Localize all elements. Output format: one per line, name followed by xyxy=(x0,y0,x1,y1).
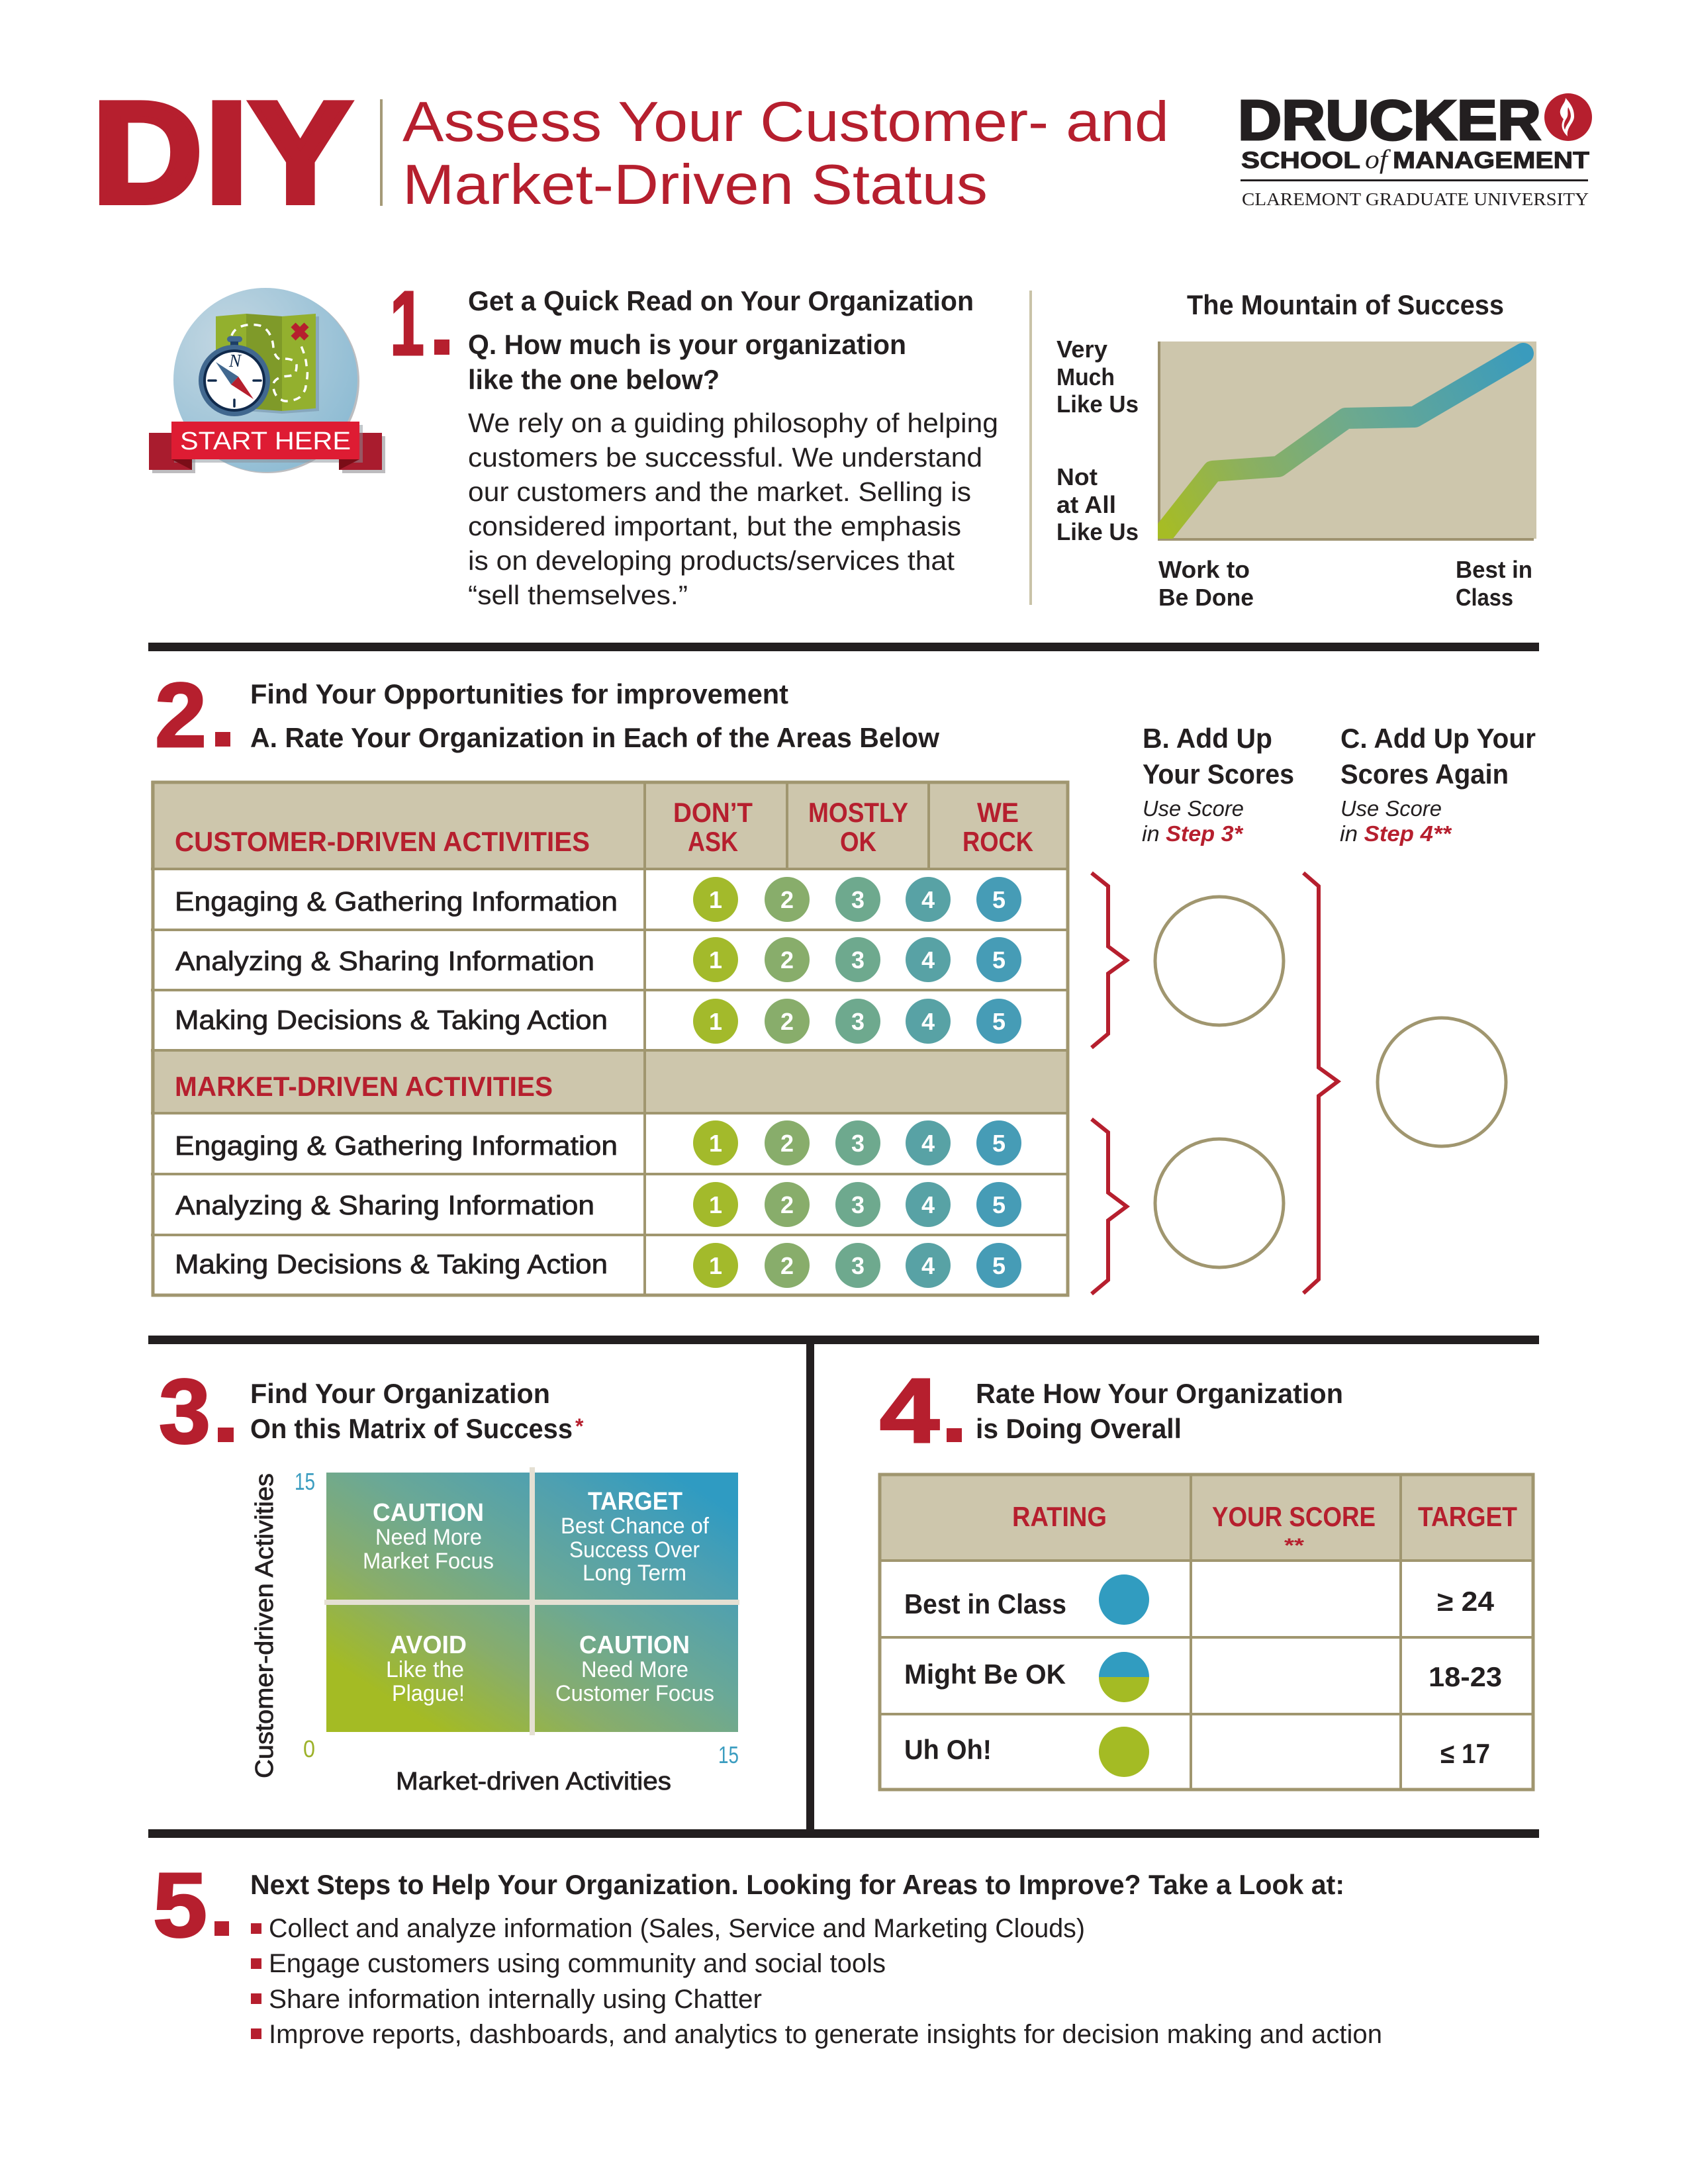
score circles row 4: 5 xyxy=(992,1130,1006,1157)
header: divider xyxy=(380,99,383,206)
rating table xyxy=(151,781,1069,1297)
step 3 heading: * xyxy=(575,1414,584,1438)
chart y axis labels: Not xyxy=(1056,463,1098,490)
row: uh oh xyxy=(904,1727,1490,1777)
score circles row 2 xyxy=(693,937,1021,982)
quadrant: caution, market focus: CAUTION xyxy=(373,1499,484,1527)
column headers: ** xyxy=(1284,1535,1304,1557)
quadrant: caution, customer focus: Need More xyxy=(581,1657,688,1682)
Drucker School of Management logo: SCHOOL xyxy=(1241,148,1360,173)
step 1 heading xyxy=(468,285,974,395)
quadrant: caution, market focus: Need More xyxy=(375,1525,482,1550)
step 1 heading: Q. How much is your organization xyxy=(468,329,906,360)
quadrant: avoid: Like the xyxy=(386,1657,464,1682)
score circles row 2: 1 xyxy=(709,946,722,974)
column B heading: Use Score xyxy=(1143,796,1244,821)
step 1 body text: our customers and the market. Selling is xyxy=(468,477,971,507)
score circles row 5: 4 xyxy=(921,1191,935,1218)
next steps list: Collect and analyze information (Sales, Service and Marketing Clouds) xyxy=(269,1914,1085,1943)
quadrant: target: Long Term xyxy=(583,1561,686,1586)
score circles row 6: 4 xyxy=(921,1252,935,1279)
quadrant: caution, customer focus: Customer Focus xyxy=(555,1681,714,1706)
score circles row 5: 3 xyxy=(851,1191,865,1218)
score circles row 6: 1 xyxy=(709,1252,722,1279)
step 2 heading: Find Your Opportunities for improvement xyxy=(250,678,788,709)
icon: start here badge with map and compass: N xyxy=(228,351,242,371)
row: best in class: Best in Class xyxy=(904,1588,1066,1619)
icon: start here badge with map and compass xyxy=(149,288,385,473)
step 2 number xyxy=(155,664,230,766)
step 5 number: 5 xyxy=(153,1854,207,1956)
quadrant: caution, customer focus xyxy=(555,1631,714,1706)
matrix of success xyxy=(324,1467,739,1735)
customer row labels: Analyzing & Sharing Information xyxy=(175,946,594,976)
column C heading: in Step 4** xyxy=(1340,821,1452,846)
score circles row 2: 4 xyxy=(921,946,935,974)
score circles row 5: 1 xyxy=(709,1191,722,1218)
bracket: customer-driven scores xyxy=(1092,873,1127,1048)
score circles row 1: 5 xyxy=(992,886,1006,913)
Drucker School of Management logo: DRUCKER xyxy=(1238,89,1541,152)
matrix axis values: 15 xyxy=(718,1741,739,1768)
step 1 body text: is on developing products/services that xyxy=(468,545,955,576)
matrix axis values: 15 xyxy=(295,1468,315,1495)
quadrant: target xyxy=(561,1488,710,1586)
step 1 vertical divider xyxy=(1029,291,1032,605)
step 1 body text: customers be successful. We understand xyxy=(468,442,982,473)
next steps list: Improve reports, dashboards, and analytics to generate insights for decision making and action xyxy=(269,2020,1382,2049)
step 3 heading: Find Your Organization xyxy=(250,1378,550,1409)
quadrant: target: Success Over xyxy=(569,1537,700,1563)
customer row labels: Making Decisions & Taking Action xyxy=(175,1005,608,1035)
row: best in class: ≥ 24 xyxy=(1437,1586,1495,1617)
column header: mostly ok xyxy=(808,797,908,857)
next steps list xyxy=(251,1914,1382,2049)
customer row labels xyxy=(175,886,618,1035)
step 4 heading: Rate How Your Organization xyxy=(976,1378,1343,1409)
row: might be ok: Might Be OK xyxy=(904,1659,1066,1690)
score circles row 5 xyxy=(693,1182,1021,1227)
Drucker School of Management logo xyxy=(1238,89,1592,209)
chart y axis labels: Very xyxy=(1056,336,1107,363)
step 3 number: 3 xyxy=(159,1361,211,1463)
score circles row 3: 5 xyxy=(992,1008,1006,1035)
column C heading: Use Score xyxy=(1340,796,1442,821)
title: Assess Your Customer- and xyxy=(402,91,1169,154)
score circles row 6 xyxy=(693,1243,1021,1288)
Drucker School of Management logo: CLAREMONT GRADUATE UNIVERSITY xyxy=(1242,189,1589,209)
column header: we rock: ROCK xyxy=(962,826,1033,857)
score circles row 1: 2 xyxy=(780,886,794,913)
score circles row 1: 4 xyxy=(921,886,935,913)
score circles row 4: 3 xyxy=(851,1130,865,1157)
column headers xyxy=(1012,1501,1517,1557)
score circles row 4 xyxy=(693,1120,1021,1165)
step 3 heading: On this Matrix of Success xyxy=(250,1413,573,1444)
step 2 heading: A. Rate Your Organization in Each of the Areas Below xyxy=(250,722,939,753)
column C heading xyxy=(1340,723,1536,846)
column B heading: in Step 3* xyxy=(1142,821,1244,846)
column B heading: Your Scores xyxy=(1143,758,1294,790)
score circles row 2: 5 xyxy=(992,946,1006,974)
score circles row 5: 5 xyxy=(992,1191,1006,1218)
column headers: RATING xyxy=(1012,1501,1107,1532)
step 4 heading: is Doing Overall xyxy=(976,1413,1182,1444)
score circle: market-driven total xyxy=(1155,1139,1284,1267)
step 4 number xyxy=(880,1360,962,1462)
quadrant: avoid: Plague! xyxy=(392,1681,465,1706)
quadrant: caution, customer focus: CAUTION xyxy=(579,1631,690,1659)
next steps list: Engage customers using community and social tools xyxy=(269,1949,886,1978)
quadrant: target: Best Chance of xyxy=(561,1514,710,1539)
step 5 number xyxy=(153,1854,229,1956)
column headers: YOUR SCORE xyxy=(1212,1501,1376,1532)
row: uh oh: Uh Oh! xyxy=(904,1734,992,1765)
customer row labels: Engaging & Gathering Information xyxy=(175,886,618,917)
column B heading: B. Add Up xyxy=(1143,723,1272,754)
chart x axis labels: Class xyxy=(1456,584,1513,611)
score circles row 6: 2 xyxy=(780,1252,794,1279)
column headers: TARGET xyxy=(1418,1501,1517,1532)
market row labels: Analyzing & Sharing Information xyxy=(175,1190,594,1220)
Drucker School of Management logo: MANAGEMENT xyxy=(1393,148,1589,173)
market row labels: Engaging & Gathering Information xyxy=(175,1130,618,1161)
title: Market-Driven Status xyxy=(402,154,988,216)
step 1 body text: We rely on a guiding philosophy of helping xyxy=(468,408,998,438)
column C heading: C. Add Up Your xyxy=(1340,723,1536,754)
row: might be ok: 18-23 xyxy=(1429,1661,1502,1692)
column C heading: Scores Again xyxy=(1340,758,1509,790)
row: might be ok xyxy=(904,1652,1502,1702)
score circles row 3: 3 xyxy=(851,1008,865,1035)
score circles row 5: 2 xyxy=(780,1191,794,1218)
step 4 heading xyxy=(976,1378,1343,1444)
chart y axis labels: Much xyxy=(1056,363,1115,390)
chart y axis labels: at All xyxy=(1056,491,1116,518)
step 3 heading xyxy=(250,1378,584,1444)
column header: don't ask: ASK xyxy=(688,826,738,857)
rating table overall xyxy=(878,1473,1534,1791)
title xyxy=(402,91,1169,216)
column header: we rock xyxy=(962,797,1033,857)
score circles row 3: 4 xyxy=(921,1008,935,1035)
score circles row 1: 1 xyxy=(709,886,722,913)
Drucker School of Management logo: of xyxy=(1365,144,1391,174)
column header: don't ask: DON’T xyxy=(673,797,753,828)
step 1 body text xyxy=(468,408,998,610)
chart y axis labels: Like Us xyxy=(1056,390,1139,418)
column B heading xyxy=(1142,723,1294,846)
chart y axis labels xyxy=(1056,336,1139,545)
header: DIY wordmark: DIY xyxy=(93,73,351,233)
market row labels xyxy=(175,1130,618,1279)
row: best in class xyxy=(904,1574,1495,1625)
quadrant: caution, market focus: Market Focus xyxy=(363,1549,494,1574)
step 2 number: 2 xyxy=(155,664,207,766)
column header: mostly ok: MOSTLY xyxy=(808,797,908,828)
step 1 number: 1 xyxy=(390,273,424,375)
score circles row 2: 2 xyxy=(780,946,794,974)
step 2 heading xyxy=(250,678,939,753)
bracket: market-driven scores xyxy=(1092,1119,1127,1294)
step 1 body text: considered important, but the emphasis xyxy=(468,511,961,541)
matrix y axis label: Customer-driven Activities xyxy=(251,1473,279,1778)
chart y axis labels: Like Us xyxy=(1056,518,1139,545)
chart x axis labels xyxy=(1158,556,1532,611)
score circle: customer-driven total xyxy=(1155,897,1284,1025)
quadrant: caution, market focus xyxy=(363,1499,494,1574)
step 5 heading: Next Steps to Help Your Organization. Looking for Areas to Improve? Take a Look at: xyxy=(250,1869,1344,1900)
next steps list: Share information internally using Chatter xyxy=(269,1985,762,2014)
score circles row 1 xyxy=(693,877,1021,922)
quadrant: avoid xyxy=(386,1631,467,1706)
row: uh oh: ≤ 17 xyxy=(1440,1738,1490,1769)
score circles row 6: 3 xyxy=(851,1252,865,1279)
bracket: combined score xyxy=(1303,873,1338,1293)
table header: customer-driven activities: CUSTOMER-DRIVEN ACTIVITIES xyxy=(175,826,590,857)
step 1 heading: Get a Quick Read on Your Organization xyxy=(468,285,974,316)
score circles row 4: 4 xyxy=(921,1130,935,1157)
icon: start here badge with map and compass: START HERE xyxy=(180,428,351,455)
market row labels: Making Decisions & Taking Action xyxy=(175,1249,608,1279)
score circles row 3: 1 xyxy=(709,1008,722,1035)
column header: we rock: WE xyxy=(977,797,1019,828)
chart plot area and success line xyxy=(1150,341,1536,550)
score circles row 3 xyxy=(693,999,1021,1044)
chart x axis labels: Be Done xyxy=(1158,584,1254,611)
score circles row 3: 2 xyxy=(780,1008,794,1035)
score circles row 4: 1 xyxy=(709,1130,722,1157)
score circles row 2: 3 xyxy=(851,946,865,974)
quadrant: avoid: AVOID xyxy=(390,1631,467,1659)
step 1 heading: like the one below? xyxy=(468,364,720,395)
score circle: overall total xyxy=(1378,1018,1506,1146)
chart title: The Mountain of Success xyxy=(1187,289,1504,320)
table header: market-driven activities: MARKET-DRIVEN ACTIVITIES xyxy=(175,1071,553,1102)
column header: don't ask xyxy=(673,797,753,857)
score circles row 1: 3 xyxy=(851,886,865,913)
matrix axis values xyxy=(295,1468,739,1768)
step 3 number xyxy=(159,1361,234,1463)
score circles row 6: 5 xyxy=(992,1252,1006,1279)
step 1 body text: “sell themselves.” xyxy=(468,580,688,610)
chart x axis labels: Work to xyxy=(1158,556,1250,583)
column header: mostly ok: OK xyxy=(840,826,876,857)
quadrant: target: TARGET xyxy=(588,1488,682,1516)
matrix axis values: 0 xyxy=(303,1735,315,1762)
chart: the mountain of success xyxy=(1056,289,1536,611)
step 4 number: 4 xyxy=(880,1360,939,1462)
chart x axis labels: Best in xyxy=(1456,556,1532,583)
score circles row 4: 2 xyxy=(780,1130,794,1157)
matrix x axis label: Market-driven Activities xyxy=(396,1768,671,1796)
